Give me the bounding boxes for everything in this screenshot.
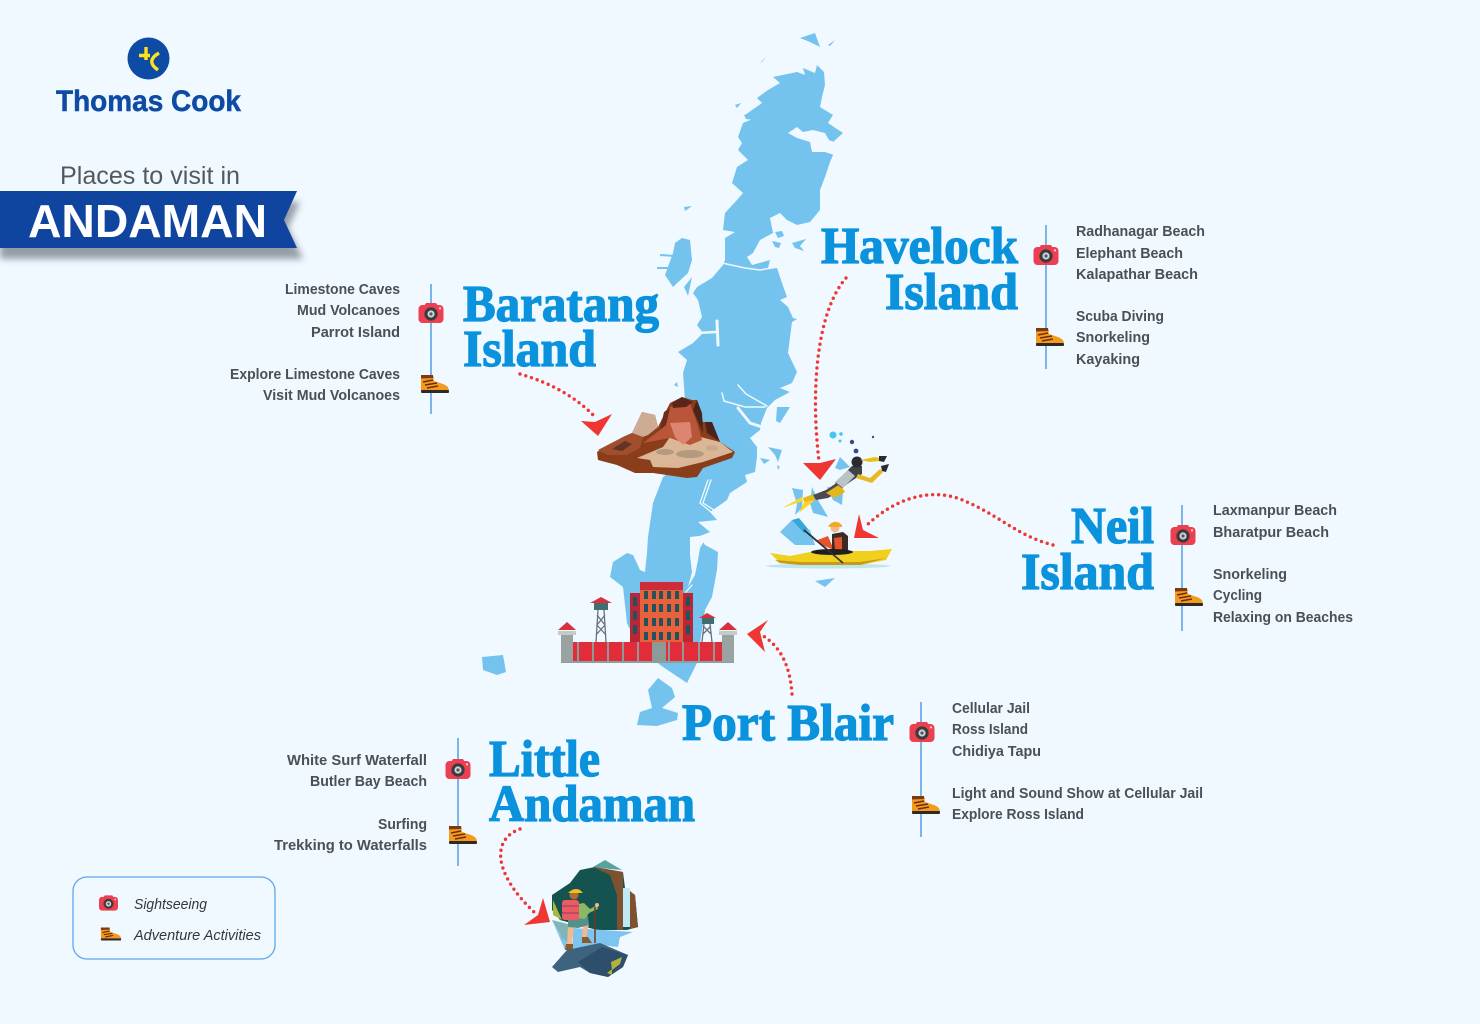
arrow: Port Blair to jail bbox=[747, 620, 792, 694]
icon: camera bbox=[446, 759, 470, 779]
heading: Little Andaman: Andaman bbox=[489, 776, 695, 833]
info block: Havelock bbox=[1034, 224, 1205, 369]
icon: boot bbox=[912, 796, 940, 814]
heading: Baratang Island: Baratang bbox=[463, 276, 659, 333]
Baratang sightseeing list: Parrot Island bbox=[311, 325, 400, 341]
icon: boot bbox=[1175, 588, 1203, 606]
heading: Baratang Island bbox=[463, 276, 659, 378]
Neil adventure list: Snorkeling bbox=[1213, 567, 1287, 583]
illustration: hiker at waterfall bbox=[552, 860, 638, 977]
Neil sightseeing list: Laxmanpur Beach bbox=[1213, 503, 1337, 519]
heading: Neil Island bbox=[1021, 498, 1154, 601]
Little Andaman adventure list: Surfing bbox=[378, 817, 427, 833]
logo wordmark: Thomas Cook bbox=[56, 85, 242, 118]
arrow: Havelock to diver bbox=[803, 278, 846, 480]
illustration: kayaker bbox=[766, 518, 892, 568]
icon: boot bbox=[1036, 328, 1064, 346]
logo emblem bbox=[128, 38, 170, 80]
Neil sightseeing list: Bharatpur Beach bbox=[1213, 525, 1329, 541]
main island landmass bbox=[610, 65, 843, 683]
arrow: Neil to kayak bbox=[854, 495, 1053, 545]
Interview island bbox=[665, 238, 692, 287]
Neil adventure list bbox=[1213, 567, 1353, 626]
icon: boot bbox=[101, 928, 121, 940]
Little Andaman sightseeing list: Butler Bay Beach bbox=[310, 774, 427, 790]
watchtowers bbox=[590, 597, 716, 642]
title banner: ANDAMAN bbox=[28, 195, 267, 247]
logo bbox=[56, 38, 242, 118]
heading: Havelock Island bbox=[821, 218, 1018, 321]
heading: Port Blair: Port Blair bbox=[682, 695, 894, 752]
Port Blair adventure list bbox=[952, 786, 1203, 823]
Port Blair sightseeing list: Cellular Jail bbox=[952, 701, 1030, 717]
icon: camera bbox=[910, 722, 934, 742]
heading: Neil Island: Neil bbox=[1071, 498, 1154, 555]
subtitle: Places to visit in bbox=[60, 162, 240, 190]
legend label: sightseeing: Sightseeing bbox=[134, 897, 207, 913]
Baratang adventure list: Explore Limestone Caves bbox=[230, 367, 400, 383]
illustration: mountain bbox=[597, 397, 735, 478]
Havelock sightseeing list bbox=[1076, 224, 1205, 283]
arrow: Baratang to mountain bbox=[520, 374, 612, 436]
corner towers bbox=[558, 622, 737, 662]
heading: Little Andaman bbox=[489, 731, 695, 833]
icon: boot bbox=[449, 826, 477, 844]
Havelock sightseeing list: Radhanagar Beach bbox=[1076, 224, 1205, 240]
Port Blair sightseeing list: Chidiya Tapu bbox=[952, 744, 1041, 760]
Port Blair adventure list: Explore Ross Island bbox=[952, 807, 1084, 823]
Port Blair sightseeing list bbox=[952, 701, 1041, 760]
Baratang sightseeing list: Mud Volcanoes bbox=[297, 303, 400, 319]
heading: Neil Island: Island bbox=[1021, 544, 1154, 601]
Havelock adventure list: Kayaking bbox=[1076, 352, 1140, 368]
Baratang adventure list bbox=[230, 367, 400, 404]
heading: Baratang Island: Island bbox=[463, 321, 596, 378]
illustration: Cellular Jail bbox=[558, 582, 737, 663]
Little Andaman sightseeing list bbox=[287, 753, 427, 790]
info block: Little Andaman bbox=[274, 738, 477, 866]
info block: Baratang bbox=[230, 282, 449, 414]
Havelock sightseeing list: Elephant Beach bbox=[1076, 246, 1183, 262]
info block: Port Blair bbox=[910, 701, 1203, 837]
Little Andaman sightseeing list: White Surf Waterfall bbox=[287, 753, 427, 769]
heading: Havelock Island: Island bbox=[885, 264, 1018, 321]
icon: boot bbox=[421, 375, 449, 393]
main building bbox=[630, 593, 693, 643]
east coast islets bbox=[760, 231, 806, 470]
Baratang sightseeing list bbox=[285, 282, 400, 341]
Baratang sightseeing list: Limestone Caves bbox=[285, 282, 400, 298]
Ritchie archipelago bbox=[780, 457, 850, 587]
Havelock adventure list: Scuba Diving bbox=[1076, 309, 1164, 325]
legend bbox=[73, 877, 275, 959]
Havelock adventure list: Snorkeling bbox=[1076, 330, 1150, 346]
icon: camera bbox=[1034, 245, 1058, 265]
Neil adventure list: Cycling bbox=[1213, 588, 1262, 604]
info block: Neil bbox=[1170, 503, 1353, 631]
arrow: Little Andaman to hiker bbox=[501, 829, 550, 925]
perimeter wall bbox=[561, 642, 734, 662]
rock bbox=[552, 943, 628, 977]
Neil adventure list: Relaxing on Beaches bbox=[1213, 610, 1353, 626]
Havelock adventure list bbox=[1076, 309, 1164, 368]
heading: Havelock Island: Havelock bbox=[821, 218, 1018, 275]
heading: Little Andaman: Little bbox=[489, 731, 600, 788]
legend label: adventure activities: Adventure Activities bbox=[133, 928, 261, 944]
Port Blair adventure list: Light and Sound Show at Cellular Jail bbox=[952, 786, 1203, 802]
title banner bbox=[0, 191, 303, 259]
map channels and inlets bbox=[686, 127, 836, 592]
hiker figure bbox=[562, 889, 599, 950]
Rutland and southern islets bbox=[482, 655, 506, 675]
icon: camera bbox=[99, 895, 118, 911]
Neil sightseeing list bbox=[1213, 503, 1337, 541]
Port Blair sightseeing list: Ross Island bbox=[952, 722, 1028, 738]
northern islets bbox=[684, 33, 835, 211]
Little Andaman adventure list bbox=[274, 817, 427, 854]
icon: camera bbox=[1170, 525, 1196, 545]
icon: camera bbox=[418, 303, 444, 323]
illustration: scuba diver bbox=[782, 432, 889, 513]
small islet cluster near Interview island bbox=[657, 254, 692, 387]
map: Andaman islands bbox=[482, 33, 850, 726]
Baratang adventure list: Visit Mud Volcanoes bbox=[263, 388, 400, 404]
Little Andaman adventure list: Trekking to Waterfalls bbox=[274, 838, 427, 854]
Havelock sightseeing list: Kalapathar Beach bbox=[1076, 267, 1198, 283]
